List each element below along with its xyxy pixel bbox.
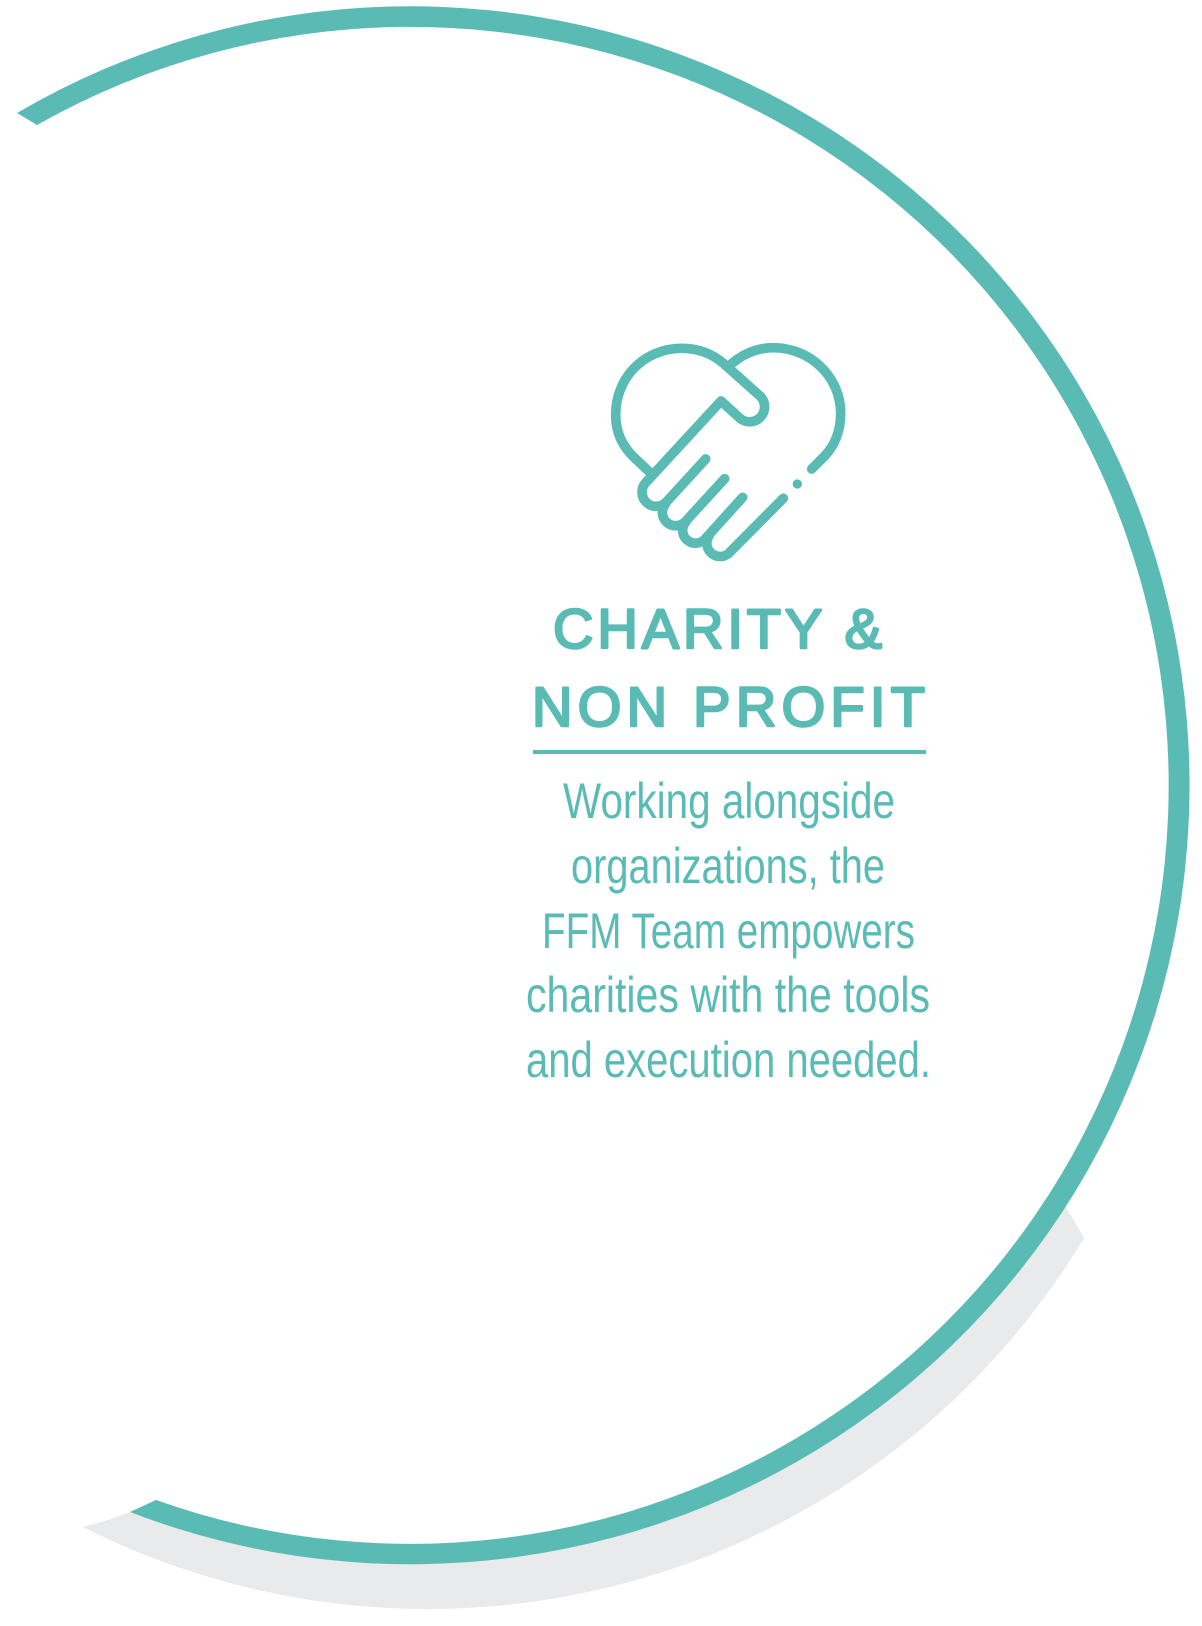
divider rule [533, 750, 926, 754]
body text: organizations, the [571, 838, 885, 894]
icon: handshake heart [616, 348, 841, 556]
body text: and execution needed. [526, 1032, 931, 1088]
body text: Working alongside [563, 773, 895, 829]
body text [526, 773, 931, 1088]
body text: FFM Team empowers [542, 903, 915, 959]
shadow crescent [83, 1207, 1084, 1609]
heading: non profit: NON PROFIT [532, 675, 925, 738]
body text: charities with the tools [526, 967, 930, 1023]
heading: charity: CHARITY & [553, 597, 882, 660]
